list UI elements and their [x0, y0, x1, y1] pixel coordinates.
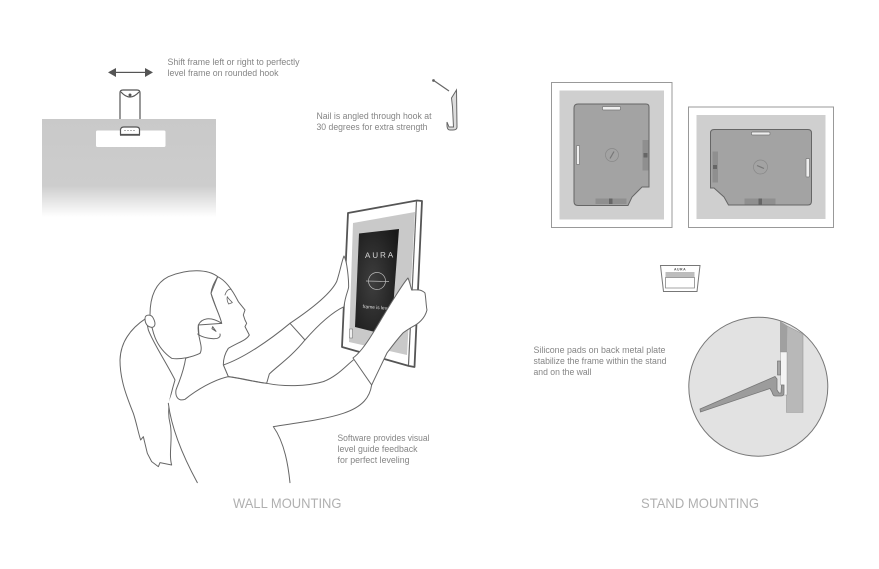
- back plate landscape: [710, 130, 812, 205]
- hair band: [145, 315, 155, 327]
- silicone pad: [778, 361, 780, 375]
- icon: angled nail and hook: [433, 80, 457, 130]
- ponytail: [120, 318, 175, 467]
- shoulder line: [228, 360, 353, 386]
- head hair: [150, 271, 222, 359]
- logo mark: [606, 148, 618, 162]
- neck and face: [176, 277, 249, 400]
- text: level frame: level frame on rounded hook: [168, 68, 279, 78]
- panel: portrait back plate: [552, 82, 672, 228]
- screen level circle: [366, 272, 389, 290]
- stand leg and hook: [700, 376, 784, 412]
- wall frame faded panel: [42, 119, 216, 217]
- text: software level feedback: level guide feedback: [338, 444, 418, 454]
- text: software level feedback: for perfect leveling: [338, 455, 410, 465]
- callout: stand section detail: [689, 317, 828, 456]
- arrow: shift left or right: [108, 68, 153, 77]
- screen: [355, 229, 399, 336]
- text: nail angle note: 30 degrees for extra strength: [316, 122, 428, 132]
- frame side edge: [408, 201, 416, 365]
- panel: wall mounting level detail: [42, 68, 216, 217]
- ear: [198, 327, 220, 339]
- torso: [168, 360, 372, 483]
- text: software level feedback: [338, 433, 430, 465]
- text: silicone pads note: stabilize the frame within the stand: [534, 356, 666, 366]
- illustration: woman holding frame: [120, 256, 427, 483]
- frame grey mat: [349, 212, 415, 355]
- text: nail angle note: [316, 111, 432, 132]
- icon: AURA stand: [660, 266, 700, 292]
- icon: rounded hook: [120, 90, 140, 135]
- text: shift frame: Shift frame left or right to perfectly: [168, 57, 300, 67]
- text: silicone pads note: and on the wall: [534, 367, 592, 377]
- heading: wall mounting: WALL MOUNTING: [233, 495, 342, 511]
- frame body: [342, 200, 422, 367]
- icon: AURA stand: AURA: [674, 268, 686, 272]
- near arm and hand: [353, 278, 427, 385]
- text: software level feedback: Software provides visual: [338, 433, 430, 443]
- text: nail angle note: Nail is angled through hook at: [316, 111, 432, 121]
- slots and pads: [752, 132, 770, 135]
- frame cross-section: [786, 326, 803, 412]
- panel: landscape back plate: [688, 107, 834, 228]
- frame sensor badge: [350, 329, 352, 338]
- text: silicone pads note: Silicone pads on back metal plate: [534, 345, 666, 355]
- slots and pads: [602, 106, 620, 110]
- heading: stand mounting: STAND MOUNTING: [641, 495, 759, 511]
- eye: [225, 289, 232, 304]
- screen level message: frame is level: [362, 304, 391, 312]
- screen brand AURA: AURA: [365, 250, 395, 260]
- illustration: frame with software level: [342, 200, 422, 367]
- far arm: [223, 256, 349, 383]
- white label slot: [96, 130, 166, 147]
- text: silicone pads note: [534, 345, 666, 377]
- back plate portrait: [574, 104, 649, 206]
- logo mark: [754, 160, 768, 174]
